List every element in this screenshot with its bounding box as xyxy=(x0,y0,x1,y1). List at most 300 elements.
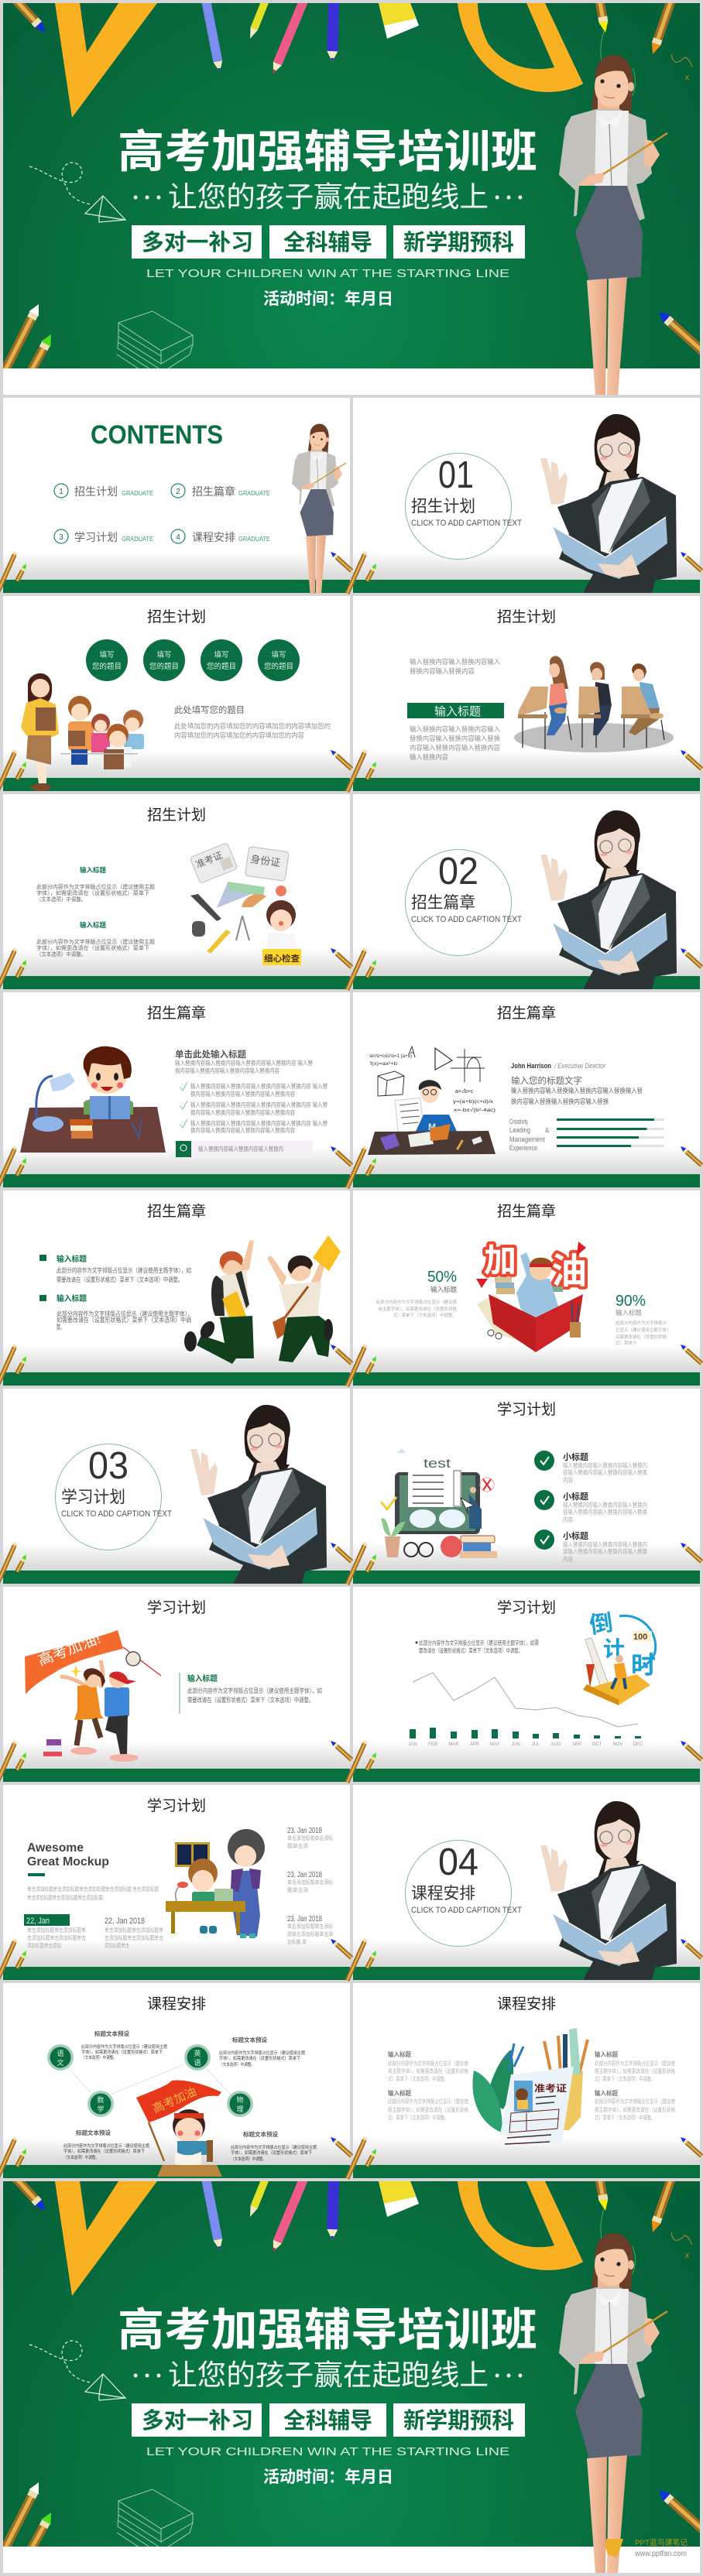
circle badges: 您的题目 xyxy=(264,662,293,671)
text block two: （文本选项）中调整。 xyxy=(36,951,86,957)
tag boxes: 多对一补习 xyxy=(142,2408,253,2434)
panel: closing slide xyxy=(0,2110,703,2576)
body text xyxy=(410,725,501,761)
title: 招生篇章 xyxy=(147,1203,206,1220)
subject notes: （文本选项）中调整。 xyxy=(219,2061,255,2067)
subject nodes: 语 xyxy=(57,2050,64,2057)
date block two: 添加标题单击 xyxy=(105,1941,129,1949)
date block one: 添加标题单击添加 xyxy=(27,1941,61,1949)
subject notes: 字体），如需更改请在（设置形状格式）菜单下 xyxy=(231,2150,312,2156)
text block one xyxy=(36,866,155,903)
checklist: 换内容输入替换内容输入替换内容输入替换内容 xyxy=(190,1126,295,1134)
title: 学习计划 xyxy=(497,1599,556,1616)
circle badges: 您的题目 xyxy=(207,662,236,671)
skill bars: Management xyxy=(509,1136,545,1143)
text list: 输入标题 xyxy=(57,1293,87,1303)
skill bars: & xyxy=(545,1127,550,1134)
contents list: 1 xyxy=(59,488,63,496)
subject nodes: 文 xyxy=(57,2058,64,2067)
contents list: 招生篇章 xyxy=(192,485,235,498)
panel: test checklist xyxy=(345,1389,703,1585)
illustration: exam items and girl: 准考证 xyxy=(194,850,224,870)
line chart xyxy=(413,1673,638,1727)
number: 01 xyxy=(438,454,474,496)
contents list: 2 xyxy=(176,488,180,496)
circle badges: 填写 xyxy=(156,650,172,659)
subject notes: 标题文本预设 xyxy=(243,2130,278,2138)
right notes: 式）菜单下（文本选项）中调整。 xyxy=(595,2075,655,2082)
title: 高考加强辅导培训班 xyxy=(118,127,537,177)
text block: 此处填加您的内容填加您的内容填加您的内容填加您的 xyxy=(174,722,331,730)
text block: 输入替换内容输入替换内容输入替换内容输入替换内容 输入替 xyxy=(175,1059,313,1067)
illustration: students at desks xyxy=(514,656,674,752)
left notes: 式）菜单下（文本选项）中调整。 xyxy=(388,2075,448,2082)
ring xyxy=(406,850,511,955)
panel: exam pass xyxy=(345,1983,703,2180)
left notes: 输入标题 xyxy=(388,2050,411,2058)
panel: timeline xyxy=(0,1785,353,1982)
subject nodes: 理 xyxy=(236,2105,244,2113)
illustration: student with maths: x=-b±√(b²-4ac) xyxy=(454,1107,496,1113)
text list: 此部分内容作为文字排版占位显示（建议使用主题字体）， xyxy=(57,1310,193,1317)
title: 课程安排 xyxy=(497,1995,556,2012)
note: 此部分内容作为文字排版占位显示（建议使用主题字体），如需 xyxy=(419,1639,539,1646)
subject notes: 字体），如需更改请在（设置形状格式）菜单下 xyxy=(81,2049,163,2055)
subtitle: 让您的孩子赢在起跑线上 xyxy=(168,181,489,213)
number: 02 xyxy=(438,851,478,892)
left notes: 此部分内容作为文字排版占位显示（建议使 xyxy=(388,2060,468,2067)
illustration: countdown: 倒 xyxy=(588,1610,615,1639)
stat 50: 50% xyxy=(427,1269,457,1286)
contents list: 4 xyxy=(176,533,180,542)
title: 学习计划 xyxy=(147,1797,206,1814)
circle badges: 填写 xyxy=(99,650,115,659)
right notes: 此部分内容作为文字排版占位显示（建议使 xyxy=(595,2060,675,2067)
right notes: 输入标题 xyxy=(595,2089,618,2097)
text block one: 输入标题 xyxy=(80,866,106,874)
illustration: admission ticket: 准考证 xyxy=(534,2082,567,2094)
panel: contents xyxy=(0,398,353,594)
illustration: boy at desk xyxy=(20,1046,166,1153)
date list right: 单击添加标题单击添标 xyxy=(287,1834,333,1841)
subject nodes: 语 xyxy=(194,2059,201,2067)
illustration: test tablet xyxy=(381,1448,497,1558)
subject nodes xyxy=(47,2044,253,2117)
stat 90: 此部分内容作为文字排版占 xyxy=(616,1320,667,1326)
subject notes xyxy=(63,2030,317,2162)
illustration: teacher with book xyxy=(190,1405,327,1584)
check items: 内容 xyxy=(563,1555,573,1563)
check items: 小标题 xyxy=(563,1530,588,1541)
caption: CLICK TO ADD CAPTION TEXT xyxy=(411,1906,522,1915)
month axis: JAN xyxy=(408,1742,417,1747)
profile text: John Harrison xyxy=(511,1062,551,1070)
green label: 输入标题 xyxy=(434,705,481,718)
check items: 输入替换内容输入替换内容输入替换内 xyxy=(563,1540,647,1548)
subject notes: （文本选项）中调整。 xyxy=(231,2156,266,2162)
panel: profile with skills xyxy=(345,992,703,1189)
subject nodes: 英 xyxy=(194,2049,201,2057)
date block one: 单击添加标题单击添加标题单 xyxy=(27,1926,86,1934)
stat 90: 输入标题 xyxy=(616,1309,643,1317)
month axis xyxy=(408,1742,643,1747)
subject notes: 字体），如需更改请在（设置形状格式）菜单下 xyxy=(219,2055,300,2061)
title: 招生篇章 xyxy=(497,1203,556,1220)
text block one: 字体），如需更改请在（设置形状格式）菜单下 xyxy=(36,889,149,896)
check items: 内容 xyxy=(563,1516,573,1523)
contents list: GRADUATE xyxy=(238,490,270,497)
connector lines xyxy=(68,2065,231,2095)
contents list: GRADUATE xyxy=(122,490,153,497)
date block two: 击添加标题单击添加标题单击 xyxy=(105,1934,163,1941)
check items: 容输入替换内容输入替换内容输入替换 xyxy=(563,1468,647,1476)
text block xyxy=(187,1673,322,1704)
panel: cheering banner xyxy=(0,1587,353,1783)
text block two xyxy=(36,921,155,957)
illustration: exam items and girl: 身份证 xyxy=(250,853,281,868)
subject notes: 此部分内容作为文字排版占位显示（建议使用主题 xyxy=(219,2050,305,2056)
body text: 内容输入替换内容输入替换内容 xyxy=(410,744,501,752)
contents list: GRADUATE xyxy=(122,536,153,543)
stat 90: 如需更改请在（设置形状格 xyxy=(616,1334,667,1340)
contents list: 学习计划 xyxy=(74,531,118,543)
date list right: 23, Jan 2018 xyxy=(287,1827,322,1835)
checklist: 换内容输入替换内容输入替换内容输入替换内容 xyxy=(190,1108,295,1116)
title: 招生篇章 xyxy=(497,1005,556,1022)
contents list: 3 xyxy=(59,533,63,542)
illustration: countdown xyxy=(583,1610,656,1705)
date list right: 题单击添 xyxy=(287,1842,308,1849)
illustration: exam items and girl: 细心检查 xyxy=(264,953,300,964)
panel: boy reading xyxy=(0,992,353,1189)
illustration: student with maths: a=√b+c xyxy=(455,1088,474,1094)
subject nodes: 物 xyxy=(236,2095,244,2104)
date block one: 22, Jan xyxy=(26,1917,50,1926)
month axis: FEB xyxy=(428,1742,437,1747)
text block: 换内容输入替换内容输入替换内容输入替换内容 xyxy=(175,1067,279,1074)
title: 高考加强辅导培训班 xyxy=(118,2305,537,2355)
illustration: banner and kids: 高考加油! xyxy=(36,1631,103,1669)
text list: 输入标题 xyxy=(57,1254,87,1264)
text block: 需要改请在（设置形状格式）菜单下（文本选项）中调整。 xyxy=(187,1696,314,1704)
text block: 输入标题 xyxy=(187,1673,218,1684)
stat 50: 式）菜单下（文本选项）中调整。 xyxy=(393,1312,457,1318)
illustration: countdown: 计 xyxy=(603,1637,625,1661)
title: 招生计划 xyxy=(147,608,206,625)
title: 学习计划 xyxy=(497,1401,556,1418)
heading block: 单击添加标题单击添加标题单击添加标题单击添加标题 单击添加标题 xyxy=(27,1885,159,1893)
right notes xyxy=(595,2050,675,2121)
panel: section 03 xyxy=(0,1389,353,1585)
text block: 此处填写您的题目 xyxy=(174,704,245,715)
number: 03 xyxy=(88,1445,129,1487)
date list right: 题单击添 xyxy=(287,1886,308,1893)
illustration: mother and child xyxy=(166,1829,265,1938)
subject nodes: 学 xyxy=(97,2105,105,2113)
intro text xyxy=(410,658,501,675)
illustration: cheer book xyxy=(476,1242,587,1352)
panel: enrolment students xyxy=(345,596,703,793)
title: 学习计划 xyxy=(147,1599,206,1616)
stat 50: 此部分内容作为文字排版占位显示（建议使 xyxy=(376,1299,457,1305)
text list: 此部分内容作为文字排版占位显示（建议使用主题字体），如 xyxy=(57,1266,191,1274)
month axis: DEC xyxy=(633,1742,643,1747)
watermark: PPT蓝鸟课笔记 xyxy=(635,2538,688,2547)
circle badges: 您的题目 xyxy=(149,662,179,671)
english tagline: LET YOUR CHILDREN WIN AT THE STARTING LINE xyxy=(146,2445,509,2458)
stat 90 xyxy=(616,1293,671,1346)
watermark xyxy=(605,2538,688,2558)
date list right: 23, Jan 2018 xyxy=(287,1871,322,1879)
contents list: GRADUATE xyxy=(238,536,270,543)
subtitle: 让您的孩子赢在起跑线上 xyxy=(168,2359,489,2391)
illustration: student with maths: sin²α+cos²α=1 (a+b) xyxy=(369,1054,412,1059)
text block two: 字体），如需更改请在（设置形状格式）菜单下 xyxy=(36,944,149,951)
stat 50: 输入标题 xyxy=(430,1286,457,1293)
subject notes: 此部分内容作为文字排版占位显示（建议使用主题 xyxy=(63,2143,149,2149)
tag boxes: 新学期预科 xyxy=(403,2408,514,2434)
checklist: 输入替换内容输入替换内容输入替换内容输入替换内容 输入替 xyxy=(190,1119,327,1127)
text list: 需要改请在（设置形状格式）菜单下（文本选项）中调整。 xyxy=(57,1276,183,1283)
contents list xyxy=(54,484,270,543)
checklist xyxy=(180,1082,327,1134)
right notes: 此部分内容作为文字排版占位显示（建议使 xyxy=(595,2098,675,2105)
illustration: student with maths: f(x)=ax²+b xyxy=(370,1062,398,1067)
panel: chart xyxy=(345,1587,703,1783)
heading block xyxy=(27,1841,159,1901)
check items: 输入替换内容输入替换内容输入替换内 xyxy=(563,1461,647,1469)
date block two xyxy=(105,1917,163,1949)
check items: 容输入替换内容输入替换内容输入替换 xyxy=(563,1508,647,1516)
left notes: 输入标题 xyxy=(388,2089,411,2097)
date list right: 加标题 单 xyxy=(287,1938,307,1945)
profile text: 换内容输入替换输入替换内容输入替换 xyxy=(511,1098,609,1105)
section name: 招生篇章 xyxy=(411,894,475,912)
illustration: student with maths: y=(a+b)(c+d)/x xyxy=(453,1099,494,1105)
panel: enrolment circles xyxy=(0,596,353,793)
english tagline: LET YOUR CHILDREN WIN AT THE STARTING LINE xyxy=(146,267,509,280)
month axis: JUN xyxy=(511,1742,520,1747)
date block one xyxy=(24,1914,86,1949)
title: 课程安排 xyxy=(147,1995,206,2012)
profile text: 输入替换内容输入替换输入替换内容输入替换输入替 xyxy=(511,1087,643,1094)
watermark: www.pptfan.com xyxy=(634,2550,687,2558)
skill bars: Leading xyxy=(509,1126,530,1134)
title: 招生计划 xyxy=(147,807,206,824)
note: 要改请在（设置形状格式）菜单下（文本选项）中调整。 xyxy=(419,1646,523,1654)
check items: 容输入替换内容输入替换内容输入替换 xyxy=(563,1547,647,1555)
panel: cover slide xyxy=(0,0,703,426)
subject notes: 此部分内容作为文字排版占位显示（建议使用主题 xyxy=(231,2144,317,2150)
illustration: teacher and children xyxy=(21,673,144,791)
title: 招生篇章 xyxy=(147,1005,206,1022)
illustration: admission ticket xyxy=(472,2028,588,2146)
heading: contents: CONTENTS xyxy=(91,420,223,450)
illustration: teacher with book xyxy=(540,810,677,989)
panel: documents checklist xyxy=(0,794,353,991)
illustration: cheer book: 加 xyxy=(484,1242,516,1279)
subtitle: ••• xyxy=(495,190,523,205)
note xyxy=(415,1639,539,1654)
tag boxes xyxy=(132,2403,525,2437)
skill bars: Experience xyxy=(509,1144,537,1152)
panel: jumping students xyxy=(0,1190,353,1387)
panel: subjects network xyxy=(0,1983,353,2180)
date block two: 单击添加标题单击添加标题单 xyxy=(105,1926,163,1934)
stat 50: 用主题字体），如需更改请在（设置形状格 xyxy=(378,1306,457,1312)
illustration: teacher xyxy=(292,423,346,594)
text block: 单击此处输入标题 xyxy=(175,1049,246,1060)
panel: percent stats xyxy=(345,1190,703,1387)
date: 活动时间：年月日 xyxy=(263,290,393,308)
left notes: 式）菜单下（文本选项）中调整。 xyxy=(388,2114,448,2121)
check items: 小标题 xyxy=(563,1491,588,1502)
date block one: 击添加标题单击添加标题单击 xyxy=(27,1934,86,1941)
date list right: 单击添加标题单击添标 xyxy=(287,1879,333,1886)
month axis: SEP xyxy=(572,1742,581,1747)
subtitle: ••• xyxy=(133,2368,161,2383)
text block: 内容填加您的内容填加您的内容填加您的内容 xyxy=(174,731,305,739)
left notes: 此部分内容作为文字排版占位显示（建议使 xyxy=(388,2098,468,2105)
illustration: teacher with book xyxy=(540,414,677,593)
bar chart xyxy=(410,1728,641,1738)
footer tip xyxy=(176,1141,313,1157)
illustration: two jumping boys xyxy=(184,1235,341,1364)
subtitle: ••• xyxy=(133,190,161,205)
check items: 输入替换内容输入替换内容输入替换内 xyxy=(563,1501,647,1509)
circle badges: 填写 xyxy=(271,650,286,659)
subject notes: （文本选项）中调整。 xyxy=(81,2054,117,2060)
subject nodes: 数 xyxy=(97,2095,105,2104)
ring xyxy=(406,454,511,559)
date list right: 题单击添加标题单击添 xyxy=(287,1930,333,1937)
illustration: cheer book: 油 xyxy=(551,1251,587,1291)
body text: 输入替换内容输入替换内容输入 xyxy=(410,725,501,733)
check items: 内容 xyxy=(563,1476,573,1484)
stat 90: 90% xyxy=(616,1293,646,1310)
checklist: 换内容输入替换内容输入替换内容输入替换内容 xyxy=(190,1090,295,1098)
panel: section 01 xyxy=(345,398,703,594)
profile text: 输入您的标题文字 xyxy=(511,1075,582,1086)
panel: section 02 xyxy=(345,794,703,991)
left notes: 用主题字体），如需更改请在（设置形状格 xyxy=(388,2106,468,2113)
section name: 课程安排 xyxy=(411,1885,475,1903)
illustration: student with maths xyxy=(368,1046,496,1155)
right notes: 用主题字体），如需更改请在（设置形状格 xyxy=(595,2067,675,2074)
profile text xyxy=(511,1062,643,1105)
text list: 如需要改请在（设置形状格式）菜单下（文本选项）中调 xyxy=(57,1316,191,1324)
section name: 学习计划 xyxy=(61,1488,125,1506)
subject notes: 字体），如需更改请在（设置形状格式）菜单下 xyxy=(63,2148,145,2154)
check items: 小标题 xyxy=(563,1451,588,1462)
text block xyxy=(175,1049,313,1074)
subject notes: 标题文本预设 xyxy=(94,2030,129,2037)
ring xyxy=(56,1444,161,1550)
text block one: 此部分内容作为文字排版占位显示（建议使用主题 xyxy=(36,883,155,890)
month axis: APR xyxy=(470,1742,480,1747)
month axis: JUL xyxy=(532,1742,540,1747)
subject notes: 标题文本预设 xyxy=(232,2036,267,2043)
illustration: child with flag xyxy=(136,2080,222,2177)
right notes: 输入标题 xyxy=(595,2050,618,2058)
circle badges: 您的题目 xyxy=(92,662,122,671)
tag boxes: 全科辅导 xyxy=(283,2408,372,2434)
caption: CLICK TO ADD CAPTION TEXT xyxy=(411,915,522,924)
illustration: banner and kids xyxy=(25,1630,161,1762)
illustration: child with flag: 高考加油 xyxy=(151,2085,198,2116)
skill bars: Creativity xyxy=(509,1118,528,1125)
tag boxes xyxy=(132,225,525,259)
contents list: 招生计划 xyxy=(74,485,118,498)
ring xyxy=(406,1841,511,1946)
left notes xyxy=(388,2050,468,2121)
text list xyxy=(39,1254,193,1331)
illustration: student with maths: M xyxy=(428,1122,436,1132)
intro text: 输入替换内容输入替换内容输入 xyxy=(410,658,501,666)
heading block: Awesome xyxy=(27,1841,84,1855)
subject notes: 此部分内容作为文字排版占位显示（建议使用主题 xyxy=(81,2043,167,2050)
check items xyxy=(534,1451,647,1563)
date list right xyxy=(287,1827,333,1945)
tag boxes: 全科辅导 xyxy=(283,230,372,255)
month axis: MAY xyxy=(490,1742,499,1747)
checklist: 输入替换内容输入替换内容输入替换内容输入替换内容 输入替 xyxy=(190,1082,327,1090)
illustration: countdown: 100 xyxy=(633,1632,647,1642)
circle badges: 填写 xyxy=(214,650,229,659)
text list: 整。 xyxy=(57,1323,64,1331)
subject notes: 标题文本预设 xyxy=(76,2129,111,2136)
caption: CLICK TO ADD CAPTION TEXT xyxy=(61,1509,172,1519)
subject notes: （文本选项）中调整。 xyxy=(63,2154,99,2160)
contents list: 课程安排 xyxy=(192,531,235,543)
text block two: 此部分内容作为文字排版占位显示（建议使用主题 xyxy=(36,938,155,945)
stat 90: 位显示（建议使用主题字体） xyxy=(616,1327,671,1333)
text block xyxy=(174,704,331,739)
title: 招生计划 xyxy=(497,608,556,625)
right notes: 用主题字体），如需更改请在（设置形状格 xyxy=(595,2106,675,2113)
illustration: exam items and girl xyxy=(190,843,301,965)
illustration: teacher with book xyxy=(540,1801,677,1980)
illustration: countdown: 时 xyxy=(631,1651,656,1679)
text block two: 输入标题 xyxy=(80,921,106,929)
text block one: （文本选项）中调整。 xyxy=(36,896,86,903)
illustration: test tablet: test xyxy=(424,1456,451,1471)
month axis: AUG xyxy=(550,1742,561,1747)
right notes: 式）菜单下（文本选项）中调整。 xyxy=(595,2114,655,2121)
green label xyxy=(407,703,504,718)
circle badges xyxy=(86,639,300,681)
month axis: NOV xyxy=(612,1742,623,1747)
panel: section 04 xyxy=(345,1785,703,1982)
text block: 此部分内容作为文字排版占位显示（建议使用主题字体），如 xyxy=(187,1687,322,1694)
month axis: MAR xyxy=(448,1742,459,1747)
date: 活动时间：年月日 xyxy=(263,2468,393,2486)
tag boxes: 新学期预科 xyxy=(403,230,514,255)
caption: CLICK TO ADD CAPTION TEXT xyxy=(411,519,522,528)
section name: 招生计划 xyxy=(411,498,475,516)
month axis: OCT xyxy=(592,1742,602,1747)
checklist: 输入替换内容输入替换内容输入替换内容输入替换内容 输入替 xyxy=(190,1101,327,1108)
stat 50 xyxy=(376,1269,457,1318)
profile text: / Executive Director xyxy=(554,1062,606,1070)
stat 90: 式）菜单下 xyxy=(616,1340,637,1346)
body text: 输入替换内容 xyxy=(410,753,449,761)
date list right: 23, Jan 2018 xyxy=(287,1915,322,1923)
left notes: 用主题字体），如需更改请在（设置形状格 xyxy=(388,2067,468,2074)
heading block: Great Mockup xyxy=(27,1855,109,1869)
body text: 替换内容输入替换内容输入替换 xyxy=(410,735,501,742)
skill bars xyxy=(509,1118,664,1152)
